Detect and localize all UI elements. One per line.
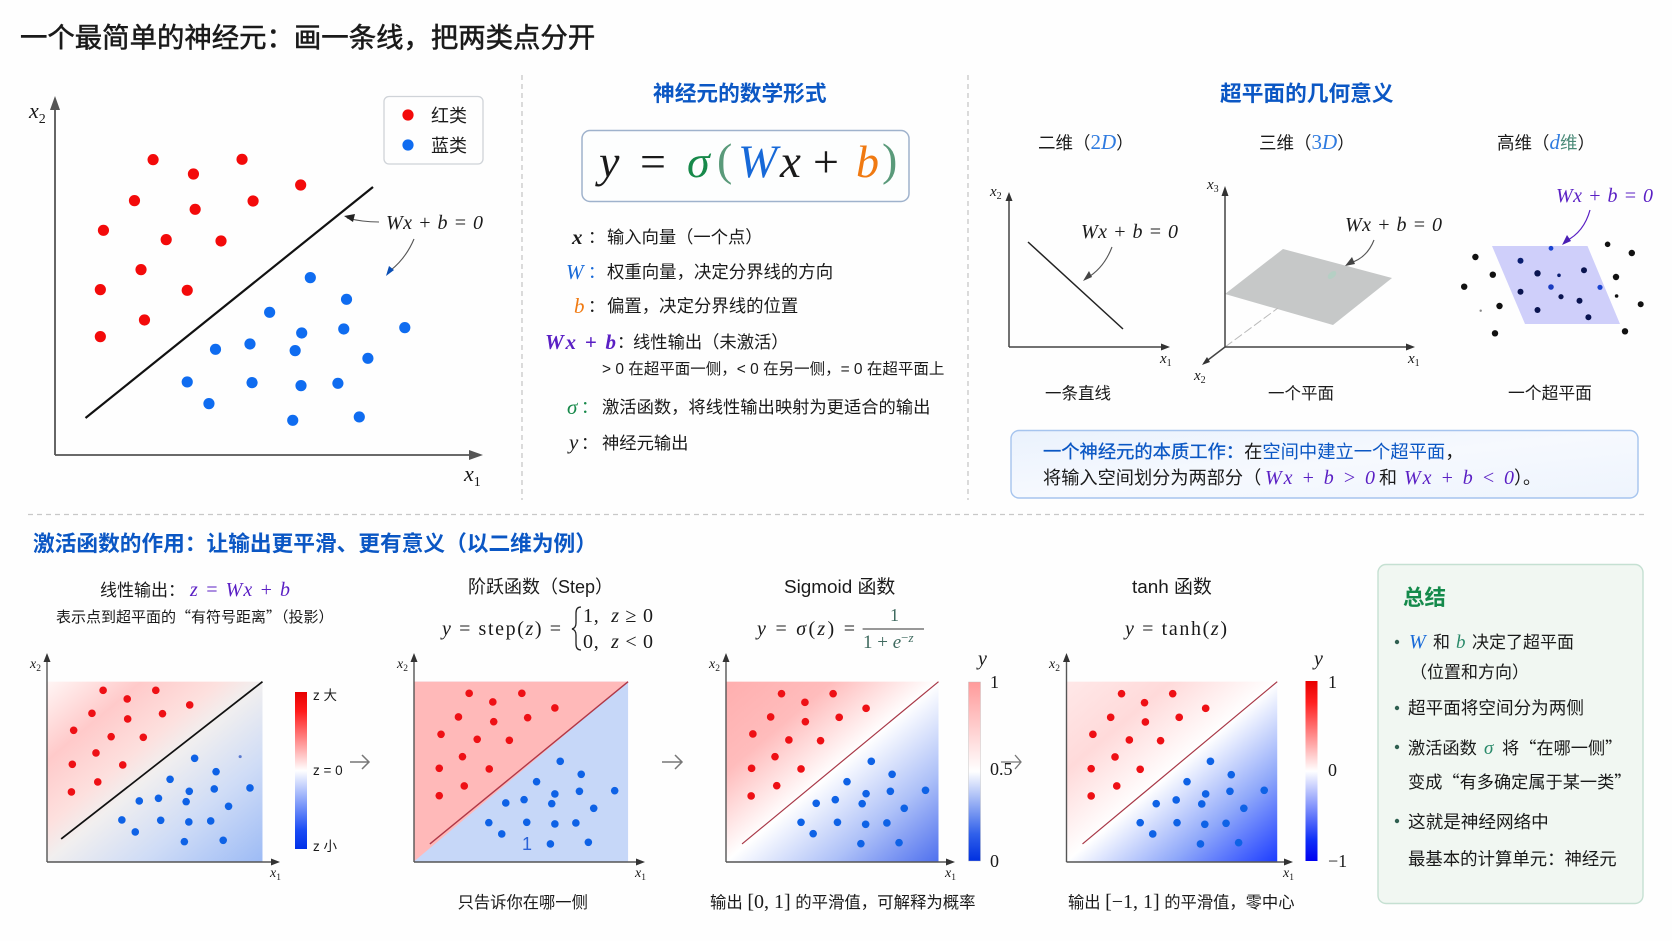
legend xyxy=(384,96,483,164)
formula box: b xyxy=(856,136,879,187)
axis labels xyxy=(29,657,281,883)
caption: 输出 [−1, 1] 的平滑值，零中心 xyxy=(1068,891,1294,913)
2D plot: x xyxy=(990,184,997,200)
definition: b: 偏置，决定分界线的位置 xyxy=(607,296,798,316)
definition: W: W xyxy=(566,260,586,284)
panel: linear output xyxy=(29,579,369,883)
2D plot xyxy=(989,184,1178,369)
axes xyxy=(44,653,280,866)
colorbar: −1 xyxy=(1328,851,1347,871)
axis labels: x xyxy=(635,866,641,881)
panel: sigmoid xyxy=(708,576,1021,913)
caption: 输出 [0, 1] 的平滑值，可解释为概率 xyxy=(710,891,976,913)
colorbar: y xyxy=(976,648,987,670)
axes xyxy=(50,96,483,460)
bullet 3: σ xyxy=(1484,738,1494,759)
axes xyxy=(722,653,955,866)
decision boundary xyxy=(86,187,373,418)
sub-heading 3D: 三维（3D） xyxy=(1259,130,1355,154)
summary box xyxy=(1378,564,1643,904)
axis labels: x xyxy=(945,866,951,881)
boundary label: Wx + b = 0 xyxy=(386,212,483,234)
axis labels: x xyxy=(397,657,403,672)
axis labels: 2 xyxy=(36,664,41,674)
formula box: σ xyxy=(687,136,712,187)
panel: math form of the neuron xyxy=(545,81,944,454)
colorbar xyxy=(295,688,343,854)
colorbar: 0.5 xyxy=(990,759,1012,779)
formula: 1 xyxy=(890,605,899,625)
header: tanh 函数 xyxy=(1132,576,1212,598)
definition: x xyxy=(571,225,763,249)
red points xyxy=(95,154,306,342)
sigmoid heatmap xyxy=(726,682,939,862)
3D plot: 3 xyxy=(1214,184,1219,195)
formula box xyxy=(582,130,909,202)
bullet 1: W xyxy=(1409,631,1428,653)
axis labels: 1 xyxy=(641,873,646,883)
panel: summary xyxy=(1378,564,1643,904)
formula: 1 + e xyxy=(863,632,901,653)
definition: Wx+b xyxy=(545,330,944,378)
formula box: = xyxy=(640,136,666,187)
bullet 4: 最基本的计算单元：神经元 xyxy=(1408,849,1617,869)
bullet 1 xyxy=(1395,631,1574,682)
heading: 超平面的几何意义 xyxy=(1220,81,1394,106)
step heatmap xyxy=(414,682,628,862)
axis labels: x xyxy=(270,866,276,881)
definition: x: x xyxy=(571,225,582,249)
3D plot: 2 xyxy=(1201,375,1206,386)
formula xyxy=(755,605,924,653)
colorbar xyxy=(968,648,1012,871)
axis labels: 1 xyxy=(1289,873,1294,883)
formula: y = tanh(z) xyxy=(1123,618,1227,640)
bullet 3: 将“在哪一侧” xyxy=(1502,734,1622,759)
bullet 1: （位置和方向） xyxy=(1410,663,1529,682)
section heading: activation functions: 激活函数的作用：让输出更平滑、更有意义（以二维为例） xyxy=(33,531,597,556)
caption 3D: 一个平面 xyxy=(1268,384,1334,403)
header: 阶跃函数（Step） xyxy=(468,577,613,597)
caption high dimension: 一个超平面 xyxy=(1508,384,1592,403)
subtitle: 表示点到超平面的“有符号距离”（投影） xyxy=(56,606,334,627)
header: z = Wx + b xyxy=(189,579,290,601)
sub-heading 2D: 二维（2D） xyxy=(1038,130,1134,154)
summary heading: 总结 xyxy=(1403,586,1446,610)
axis labels: x xyxy=(29,98,39,123)
formula: 0, z < 0 xyxy=(583,631,653,653)
axis labels: x xyxy=(30,657,36,672)
formula xyxy=(440,605,653,653)
definition: Wx+b: > 0 在超平面一侧，< 0 在另一侧，= 0 在超平面上 xyxy=(602,360,944,378)
bullet 3: 变成“有多确定属于某一类” xyxy=(1408,768,1631,793)
bullet 1: 决定了超平面 xyxy=(1472,633,1574,652)
colorbar: 0 xyxy=(1328,760,1337,780)
panel: tanh xyxy=(1048,576,1347,913)
formula box: ) xyxy=(882,134,897,185)
definition: Wx+b: 线性输出（未激活） xyxy=(633,332,789,352)
definition: y: y xyxy=(567,430,579,454)
2D plot: Wx + b = 0 xyxy=(1081,221,1178,243)
3D plot xyxy=(1193,177,1442,386)
formula: −z xyxy=(901,630,914,645)
axes xyxy=(1063,653,1293,866)
legend: 红类 xyxy=(431,106,467,126)
bullet 3: 激活函数 xyxy=(1408,738,1477,758)
3D plot: 1 xyxy=(1415,358,1420,369)
axis labels xyxy=(396,657,646,883)
definition: x: 输入向量（一个点） xyxy=(607,227,763,247)
formula box: y xyxy=(595,136,620,187)
bullet 3 xyxy=(1395,734,1631,793)
axis labels: 2 xyxy=(39,112,46,127)
3D plot: x xyxy=(1408,351,1415,367)
axis labels: 1 xyxy=(474,475,481,490)
callout: Wx + b > 0 xyxy=(1265,467,1375,489)
heading: 神经元的数学形式 xyxy=(653,81,827,106)
bullet 2: 超平面将空间分为两侧 xyxy=(1408,698,1584,718)
definition: b: b xyxy=(574,294,584,318)
caption 2D: 一条直线 xyxy=(1045,384,1111,403)
axis labels: x xyxy=(1049,657,1055,672)
axis labels xyxy=(708,657,956,883)
header: Sigmoid 函数 xyxy=(784,576,895,598)
annotation arrows xyxy=(344,214,414,276)
formula: y = σ(z) = xyxy=(755,618,855,640)
formula: y = step(z) = xyxy=(440,618,561,640)
definition: y: 神经元输出 xyxy=(602,433,688,453)
definition: sigma: 激活函数，将线性输出映射为更适合的输出 xyxy=(602,397,930,417)
callout: Wx + b < 0 xyxy=(1404,467,1514,489)
bullet 1: b xyxy=(1456,632,1466,653)
arrow xyxy=(662,755,682,769)
axis labels: x xyxy=(464,461,474,486)
3D plot: x xyxy=(1194,368,1201,384)
title: 一个最简单的神经元：画一条线，把两类点分开 xyxy=(20,22,595,53)
colorbar: 1 xyxy=(1328,672,1337,692)
colorbar: y xyxy=(1312,648,1323,670)
colorbar: z 大 xyxy=(313,688,337,703)
colorbar: z 小 xyxy=(313,839,338,854)
colorbar xyxy=(1306,648,1347,871)
high-dimension plot xyxy=(1461,185,1653,336)
callout: 和 xyxy=(1379,468,1397,488)
axis labels: 2 xyxy=(403,664,408,674)
blue points xyxy=(182,272,410,426)
definition: x: ： xyxy=(588,228,605,247)
axis labels xyxy=(1048,657,1294,883)
axis labels: x xyxy=(1283,866,1289,881)
axis labels: 1 xyxy=(951,873,956,883)
definition: sigma: ： xyxy=(581,398,598,417)
axis labels: 2 xyxy=(1055,664,1060,674)
header xyxy=(100,579,290,601)
legend: 蓝类 xyxy=(431,136,467,156)
axis labels xyxy=(28,98,481,490)
tanh heatmap xyxy=(1066,682,1277,862)
bullet 4 xyxy=(1395,812,1617,869)
2D plot: x xyxy=(1160,351,1167,367)
callout: 将输入空间划分为两部分（ xyxy=(1043,468,1261,488)
arrow xyxy=(1001,755,1021,769)
colorbar: 0 xyxy=(990,851,999,871)
callout xyxy=(1011,430,1638,498)
definition: W: ： xyxy=(588,263,605,282)
high-dimension plot: Wx + b = 0 xyxy=(1556,185,1653,207)
bullet 1: 和 xyxy=(1433,633,1450,652)
definition: y xyxy=(567,430,688,454)
2D plot: 1 xyxy=(1167,358,1172,369)
3D plot: Wx + b = 0 xyxy=(1345,214,1442,236)
formula box: x xyxy=(779,136,801,188)
callout: ）。 xyxy=(1514,468,1541,488)
axis labels: 1 xyxy=(276,873,281,883)
definition: Wx+b: ： xyxy=(617,333,634,352)
definition: sigma: σ xyxy=(567,395,579,419)
sub-heading high dimension: 高维（d维） xyxy=(1497,130,1595,154)
bullet 4: 这就是神经网络中 xyxy=(1408,812,1549,832)
formula: 1, z ≥ 0 xyxy=(583,605,653,627)
definition: y: ： xyxy=(581,434,598,453)
panel: main scatter plot xyxy=(28,96,483,490)
formula box: W xyxy=(738,136,781,188)
colorbar: z = 0 xyxy=(313,763,343,778)
definition: Wx+b: Wx + b xyxy=(545,330,616,354)
2D plot: 2 xyxy=(997,191,1002,202)
panel: step function xyxy=(396,577,682,912)
3D plot: x xyxy=(1207,177,1214,193)
definition: W: 权重向量，决定分界线的方向 xyxy=(607,262,833,282)
callout: 一个神经元的本质工作：在空间中建立一个超平面， xyxy=(1043,441,1463,462)
axes xyxy=(410,653,645,866)
definition: b: ： xyxy=(588,297,605,316)
header: 线性输出： xyxy=(100,581,185,600)
axis labels: x xyxy=(709,657,715,672)
axis labels: 2 xyxy=(715,664,720,674)
caption: 只告诉你在哪一侧 xyxy=(458,894,588,912)
panel: geometric meaning of hyperplane xyxy=(989,81,1653,498)
arrow xyxy=(350,755,369,769)
colorbar: 1 xyxy=(990,672,999,692)
heatmap xyxy=(47,682,262,862)
digit on step region: 1 xyxy=(522,834,532,854)
formula box: ( xyxy=(717,134,732,185)
formula box: + xyxy=(813,136,839,187)
